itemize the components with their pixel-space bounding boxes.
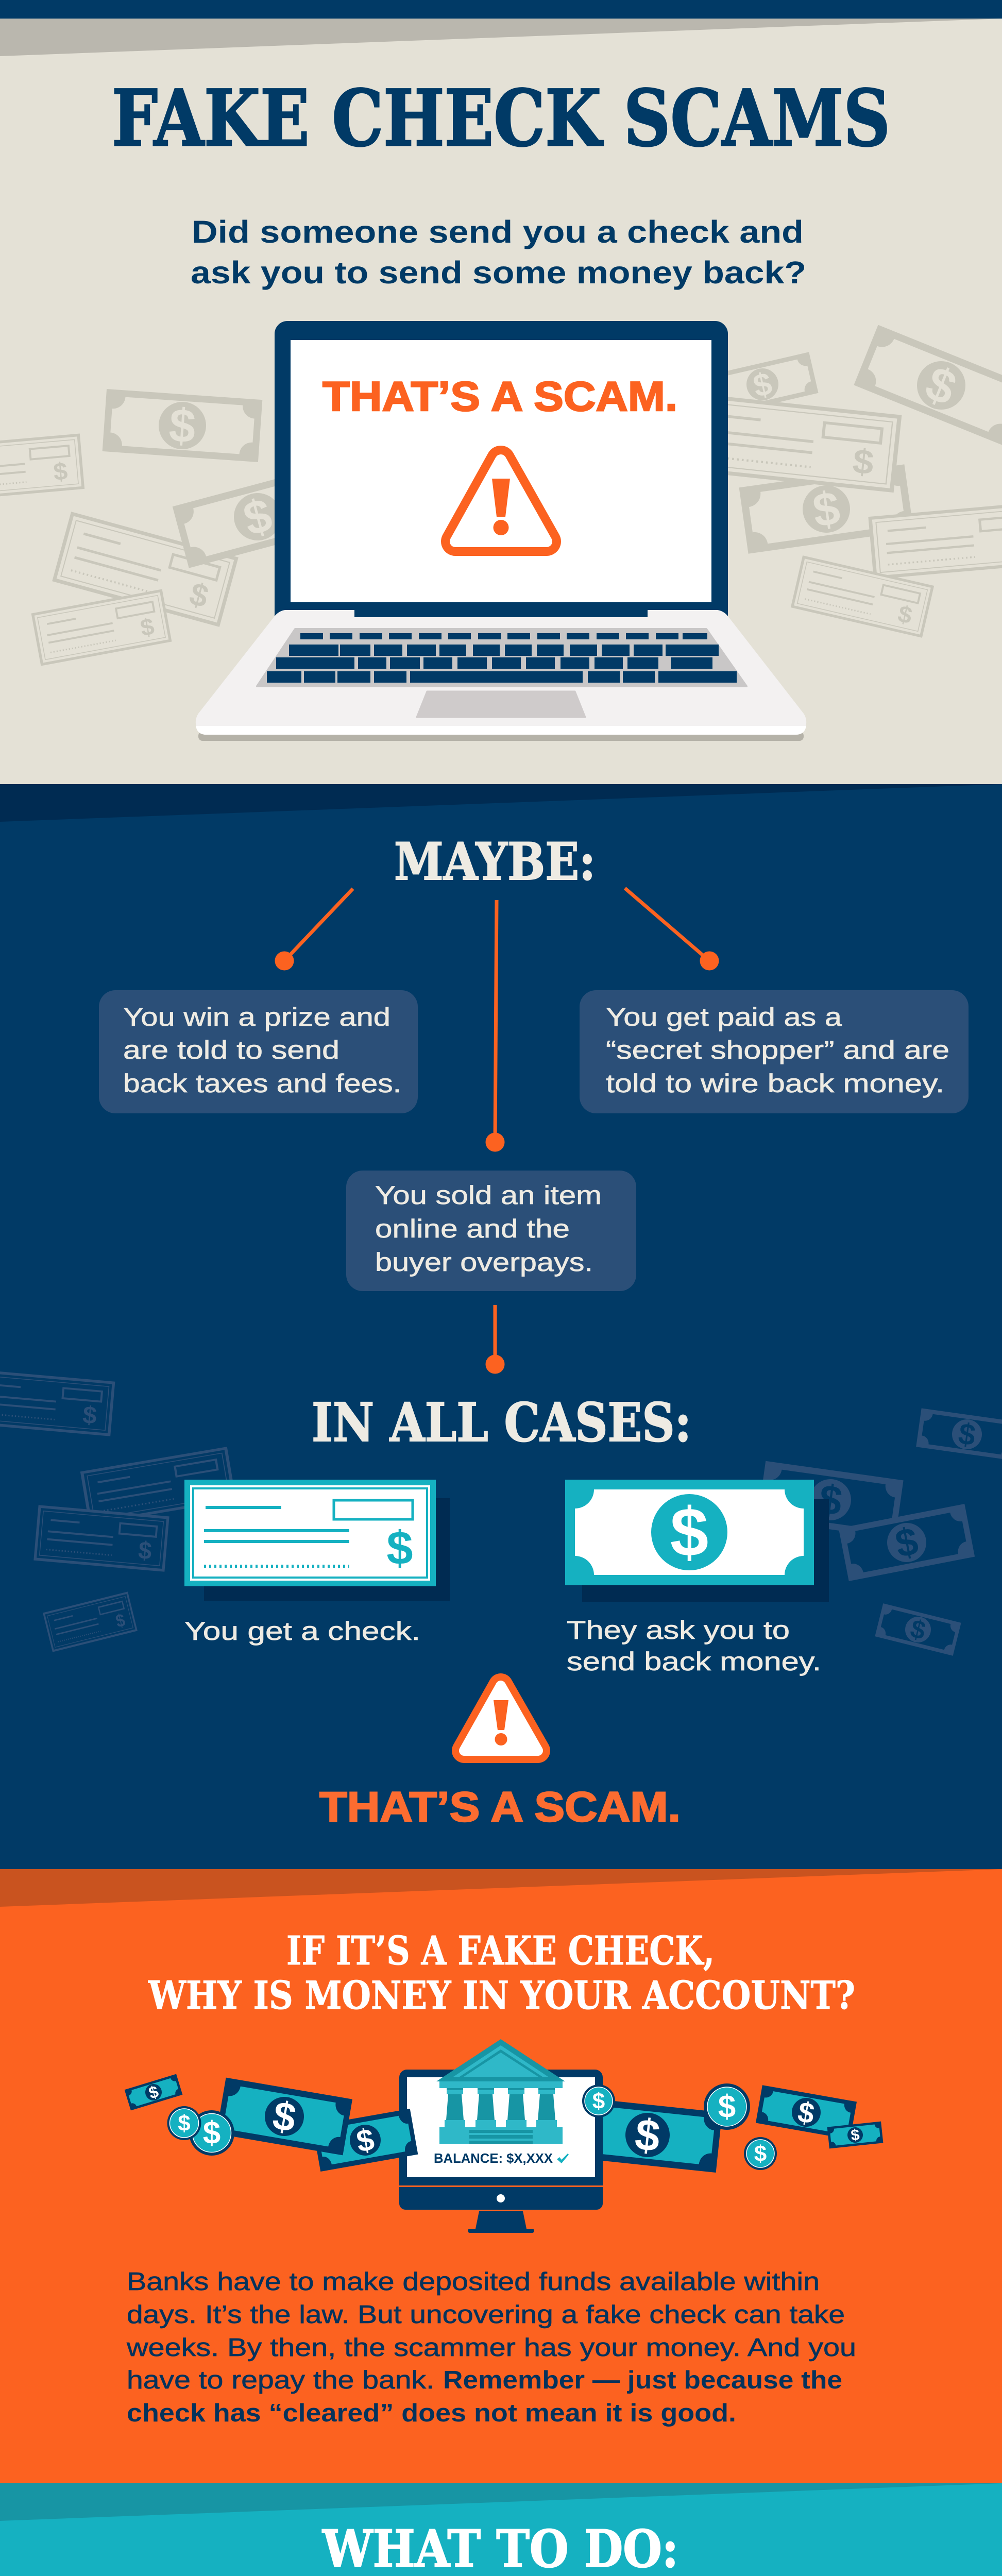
heading: if it's a fake check: WHY IS MONEY IN YOUR ACCOUNT? xyxy=(148,1973,855,2018)
heading: in all cases: IN ALL CASES: xyxy=(312,1392,691,1454)
background: faint checks left: $ xyxy=(137,1536,153,1565)
background: faint bills right: $ xyxy=(816,1476,845,1524)
text: banks explanation: Remember — just because the xyxy=(443,2366,842,2394)
coin: left large xyxy=(189,2110,234,2156)
section: navy maybe background xyxy=(0,784,1002,1869)
coin: right large xyxy=(704,2083,750,2130)
section: intro background xyxy=(0,0,1002,784)
background: scattered checks and bills, left: $ xyxy=(238,488,277,546)
bill: right behind monitor xyxy=(573,2097,722,2173)
panel: sold an item: online and the xyxy=(375,1214,570,1243)
background: scattered checks and bills, right: $ xyxy=(851,442,876,482)
keyboard xyxy=(257,629,746,686)
coin: left small xyxy=(167,2106,201,2140)
background: faint checks left xyxy=(0,1369,236,1652)
panel: secret shopper: You get paid as a xyxy=(606,1003,842,1031)
bill: top left small: $ xyxy=(146,2082,161,2103)
background: faint checks left: $ xyxy=(81,1402,98,1430)
arrow: connector to in all cases xyxy=(485,1305,505,1374)
background: scattered checks and bills, left: $ xyxy=(138,613,156,641)
icon: bill card: $ xyxy=(670,1494,708,1571)
background: scattered checks and bills, right: $ xyxy=(895,600,914,629)
text: banks explanation: have to repay the bank. xyxy=(127,2366,434,2394)
background: scattered checks and bills, left: $ xyxy=(167,399,197,453)
icon: monitor xyxy=(399,2070,603,2233)
bill: right behind monitor: $ xyxy=(633,2110,663,2161)
coin: right lower xyxy=(744,2137,777,2170)
bill: left large: $ xyxy=(269,2092,299,2141)
background: faint bills right: $ xyxy=(908,1614,928,1646)
laptop screen xyxy=(291,340,711,602)
background: faint bills right: $ xyxy=(892,1519,922,1566)
bill: right upper xyxy=(756,2085,857,2140)
panel: secret shopper: told to wire back money. xyxy=(606,1069,944,1098)
bill: right upper: $ xyxy=(795,2095,817,2130)
arrow: right connector xyxy=(625,888,719,971)
panel: secret shopper xyxy=(580,990,969,1113)
text: they ask you to send back money: They ask you to xyxy=(567,1616,790,1645)
coin: on monitor edge: $ xyxy=(592,2089,605,2114)
text: they ask you to send back money: send back money. xyxy=(567,1647,821,1676)
bill: top left small xyxy=(125,2074,182,2110)
panel: sold an item xyxy=(346,1171,636,1291)
background: faint bills right xyxy=(757,1408,1002,1656)
panel: win a prize: back taxes and fees. xyxy=(123,1069,401,1098)
icon: bill card xyxy=(565,1480,829,1602)
text: banks explanation: check has “cleared” does not mean it is good. xyxy=(127,2399,736,2427)
arrow: centre connector xyxy=(485,900,505,1152)
background: scattered checks and bills, right: $ xyxy=(750,366,775,404)
illustration: bank on monitor with flying money xyxy=(125,2039,883,2233)
arrow: left connector xyxy=(275,889,353,971)
background: scattered checks and bills, right: $ xyxy=(810,482,843,537)
coin: right large: $ xyxy=(718,2089,736,2125)
section: orange background xyxy=(0,1869,1002,2483)
icon: check card xyxy=(184,1480,450,1601)
section: teal background xyxy=(0,2483,1002,2576)
text: banks explanation: Banks have to make deposited funds available within xyxy=(127,2268,820,2296)
icon: warning triangle xyxy=(455,460,547,541)
bill: right small xyxy=(827,2122,883,2148)
background: scattered checks and bills, right xyxy=(688,325,1002,638)
background: scattered checks and bills, left xyxy=(0,389,343,666)
laptop shadow xyxy=(198,732,804,741)
subtitle xyxy=(191,214,806,290)
text: banks explanation xyxy=(126,2268,856,2427)
text: balance: BALANCE: $X,XXX xyxy=(434,2151,553,2166)
text: you get a check: You get a check. xyxy=(184,1617,420,1646)
panel: sold an item: buyer overpays. xyxy=(375,1248,593,1277)
icon: check card: $ xyxy=(386,1522,413,1574)
icon: laptop xyxy=(196,321,806,741)
panel: win a prize: are told to send xyxy=(123,1036,339,1064)
laptop lid xyxy=(275,321,728,618)
screen text: THAT’S A SCAM. xyxy=(322,374,677,420)
background: faint bills right: $ xyxy=(956,1417,977,1452)
bill: left large xyxy=(216,2078,352,2155)
text: banks explanation: days. It’s the law. But uncovering a fake check can take xyxy=(127,2301,845,2329)
bill: left of monitor: $ xyxy=(354,2122,377,2159)
coin: right lower: $ xyxy=(754,2141,767,2166)
text: that's a scam: THAT’S A SCAM. xyxy=(319,1784,681,1831)
background: scattered checks and bills, left: $ xyxy=(186,576,212,615)
text: they ask you to send back money xyxy=(567,1616,821,1676)
icon: bank xyxy=(436,2039,565,2144)
coin: on monitor edge xyxy=(582,2084,615,2117)
icon: warning triangle xyxy=(464,1686,538,1751)
panel: win a prize: You win a prize and xyxy=(123,1003,390,1031)
coin: left large: $ xyxy=(203,2115,220,2151)
bill: left of monitor xyxy=(313,2109,418,2172)
background: scattered checks and bills, right: $ xyxy=(919,355,964,416)
panel: secret shopper: “secret shopper” and are xyxy=(606,1036,949,1064)
heading: maybe: MAYBE: xyxy=(394,832,596,892)
panel: sold an item: You sold an item xyxy=(375,1181,602,1210)
laptop base xyxy=(196,610,806,735)
text: banks explanation: weeks. By then, the scammer has your money. And you xyxy=(126,2334,856,2362)
background: faint checks left: $ xyxy=(113,1609,127,1631)
coin: left small: $ xyxy=(178,2111,191,2136)
bill: right small: $ xyxy=(850,2126,860,2144)
subtitle: ask you to send some money back? xyxy=(191,255,806,290)
background: scattered checks and bills, left: $ xyxy=(52,457,69,486)
trackpad xyxy=(417,691,585,717)
subtitle: Did someone send you a check and xyxy=(192,214,804,249)
heading: if it's a fake check: IF IT’S A FAKE CHECK, xyxy=(286,1928,715,1974)
heading: if it's a fake check xyxy=(148,1928,855,2018)
panel: win a prize xyxy=(99,990,418,1113)
